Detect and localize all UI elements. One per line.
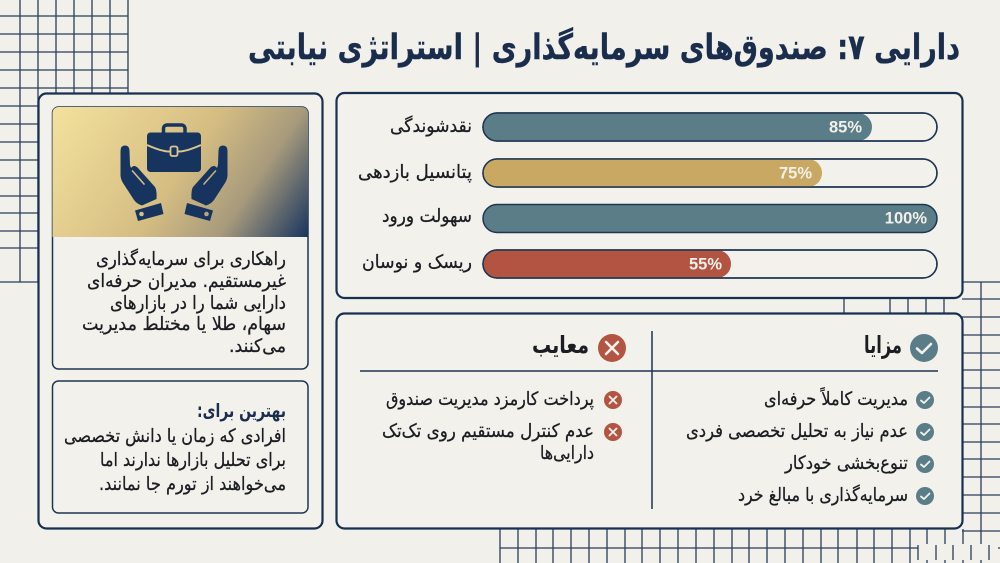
best for card [52, 381, 308, 513]
best for heading: بهترین برای: [197, 401, 286, 422]
description text: دارایی شما را در بازارهای [110, 293, 286, 314]
cons list: پرداخت کارمزد مدیریت صندوق [386, 389, 594, 410]
panel: metrics bar chart [336, 93, 962, 298]
best for text: افرادی که زمان یا دانش تخصصی [64, 426, 286, 447]
bar: ease of entry 100% [382, 204, 937, 232]
description text [82, 248, 286, 357]
bar: ease of entry 100%: سهولت ورود [382, 206, 472, 227]
icon: pros check [910, 334, 938, 362]
best for text: برای تحلیل بازارها ندارند اما [100, 450, 286, 471]
pros list: سرمایه‌گذاری با مبالغ خرد [738, 484, 908, 506]
bar: return potential 75%: پتانسیل بازدهی [358, 162, 472, 183]
bar: liquidity 85% [390, 113, 937, 141]
panel: overview [38, 94, 322, 528]
pros column [686, 331, 938, 506]
description text: سهام، طلا یا مختلط مدیریت [82, 314, 286, 335]
cons list [382, 389, 622, 464]
bar: liquidity 85%: 85% [829, 118, 862, 136]
bar: return potential 75%: 75% [779, 164, 812, 182]
cons heading: معایب [532, 331, 589, 359]
bar: risk 55% [362, 250, 937, 278]
title: دارایی ۷: صندوق‌های سرمایه‌گذاری | استراتژی نیابتی [248, 27, 960, 68]
pros heading: مزایا [864, 331, 902, 359]
bar: ease of entry 100%: 100% [885, 210, 927, 228]
cons list: عدم کنترل مستقیم روی تک‌تک [382, 421, 594, 442]
pros list: عدم نیاز به تحلیل تخصصی فردی [686, 421, 908, 442]
best for text: می‌خواهند از تورم جا نمانند. [99, 474, 286, 495]
description text: راهکاری برای سرمایه‌گذاری [96, 248, 286, 270]
pros list [686, 386, 934, 506]
pros list: تنوع‌بخشی خودکار [784, 453, 908, 474]
icon: hands holding briefcase [52, 107, 308, 237]
bar: return potential 75% [358, 159, 937, 187]
cons column [382, 331, 626, 464]
best for text [64, 426, 286, 495]
description text: می‌کنند. [229, 336, 286, 357]
bar: risk 55%: ریسک و نوسان [362, 252, 472, 273]
pros list: مدیریت کاملاً حرفه‌ای [764, 386, 908, 410]
bar: liquidity 85%: نقدشوندگی [390, 115, 472, 137]
description card [52, 107, 308, 369]
description text: غیرمستقیم. مدیران حرفه‌ای [87, 271, 286, 292]
panel: pros and cons [336, 314, 962, 528]
cons list: دارایی‌ها [540, 443, 594, 464]
bar: risk 55%: 55% [689, 256, 722, 274]
icon: cons cross [598, 334, 626, 362]
